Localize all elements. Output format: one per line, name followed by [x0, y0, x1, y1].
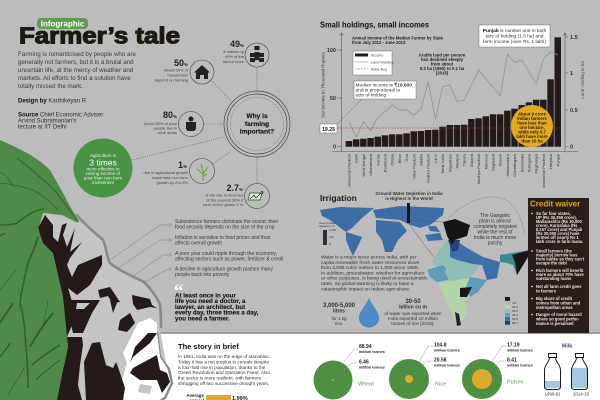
stat: 2.7% incomes of the poorest	[203, 183, 270, 208]
chart: wheat: million tonnes	[359, 366, 385, 370]
callout: arable land: (2015)	[436, 70, 449, 76]
section: the story in brief: In 1951, India was on the edge of starvation.	[178, 354, 270, 359]
illustration: farmer portrait	[0, 140, 172, 400]
state labels: Tamil Nadu	[440, 154, 445, 174]
connectors to central circle	[132, 68, 257, 184]
chart: pulses: 17.19	[507, 342, 520, 348]
legend	[353, 51, 393, 75]
state labels: Orissa	[390, 153, 395, 166]
panel: credit waiver: crore), Karnataka (Rs	[536, 223, 578, 228]
state labels: Manipur	[454, 153, 460, 168]
callout: 3 times	[74, 138, 132, 198]
left axis labels: 100	[327, 48, 336, 54]
stat: 1% agricultural growth: growth by 2%-3%	[157, 180, 188, 185]
value box: 19.25	[320, 124, 337, 133]
chart: pulses: million tonnes	[507, 364, 533, 368]
state labels: Goa	[404, 153, 409, 162]
callout: gold circle: Indian farmers	[517, 116, 547, 121]
panel: credit waiver: UP (Rs 36,359 crore),	[536, 215, 577, 220]
section heading: irrigation: Irrigation	[320, 193, 357, 203]
stat: 3,000-5,000 litres: for 1 kg	[331, 316, 347, 321]
state labels: Rajasthan	[447, 154, 452, 172]
state labels: Andhra Pradesh	[426, 154, 431, 183]
state labels: Uttar Pradesh	[411, 154, 416, 179]
bars	[346, 37, 561, 147]
line: land holding	[349, 52, 558, 137]
cheek shadows	[63, 300, 100, 333]
central circle: why is farming important	[224, 91, 290, 157]
credits	[18, 98, 103, 130]
stat: 2.7% incomes of the poorest: of the poorest 30% if	[206, 198, 244, 202]
impact text list: affecting sectors such as power, fertilizer & credit	[175, 256, 284, 262]
state labels: Tripura	[462, 153, 467, 167]
stat: 2.7% incomes of the poorest: is the rise in incomes	[206, 192, 243, 198]
map note: Gangetic plain	[473, 213, 517, 246]
irrigation text: capita renewable fresh water resources down	[321, 260, 420, 266]
callout: gold circle: than 10 ha	[521, 138, 543, 144]
impact text list: food security depends on the size of the crop	[175, 224, 275, 230]
chart: wheat	[314, 344, 385, 400]
y axis title: land: Land Holding in ha	[580, 61, 585, 99]
section: the story in brief: shrugging off two successive drought years.	[178, 381, 269, 386]
state labels: Jharkhand	[382, 154, 388, 173]
irrigation text: or other purposes, is being used at unsustainable	[321, 276, 428, 282]
callout: 3 times: Agriculture is	[90, 153, 117, 158]
section: the story in brief: The story in brief	[178, 342, 239, 351]
callout: median income: and is proportional to	[356, 88, 401, 94]
bar: average annual growth: Average	[186, 393, 204, 398]
impact text list: Inflation is sensitive to food prices and thus	[175, 235, 271, 241]
chart: wheat: Wheat	[358, 382, 374, 388]
callout: Punjab: Punjab is number one in both	[483, 28, 547, 34]
stat: 2.7% incomes of the poorest: farm sector grows 1 %	[203, 202, 243, 207]
legend: India Avg	[371, 68, 387, 72]
callout: Punjab: farm income (over Rs. 1 lakh)	[483, 39, 546, 45]
depletion legend: 1,500	[329, 228, 336, 232]
stat: 49% labour force	[223, 39, 269, 67]
callout: median income: size of holding	[356, 92, 386, 98]
right axis labels: 1.5	[570, 35, 578, 41]
stat: 80% rural poor: people live in	[154, 126, 177, 130]
right axis labels: 1	[570, 71, 573, 77]
icon: water drop	[359, 298, 379, 328]
stat: 50% households	[155, 58, 214, 84]
chart subtitle	[352, 36, 444, 45]
beard shadow	[157, 332, 172, 400]
India legend	[505, 297, 518, 325]
badge: Infographic: Infographic	[41, 20, 85, 28]
state labels: West Bengal	[361, 154, 366, 177]
credits: Source Chief Economic Adviser	[18, 112, 103, 118]
irrigation text: In addition, groundwater, whether for agriculture	[321, 270, 425, 276]
India legend: 69.5	[512, 317, 518, 321]
chart: milk bottles: 1990-91	[545, 392, 561, 396]
eye	[118, 313, 135, 332]
credits: Arvind Subramanian's	[18, 118, 77, 124]
callout: arable land: has declined steeply	[421, 57, 464, 62]
stat: 30-50 billion cu m: tonnes of rice (2015).	[391, 321, 435, 326]
quote: At least once in your	[175, 292, 236, 300]
map note: Gangetic plain: The Gangetic	[480, 213, 511, 219]
panel: credit waiver: comes from urban and	[536, 300, 581, 306]
chart: rice: 104.8	[434, 342, 447, 348]
quote: life you need a doctor, a	[175, 298, 246, 305]
section: the story in brief	[178, 342, 271, 400]
callout: gold circle: lakh have more	[516, 134, 548, 139]
callout: gold circle: one hectare,	[519, 125, 545, 130]
legend: Income	[371, 54, 383, 58]
section: the story in brief: a four-fold rise in population, thanks to the	[178, 365, 266, 370]
impact text list: people back into poverty	[175, 272, 230, 278]
intro text	[18, 51, 137, 90]
chart: pulses	[462, 342, 533, 399]
panel: credit waiver: more as about 70% have	[536, 272, 585, 277]
stat: 2.7% incomes of the poorest: 2.7%	[226, 183, 243, 193]
state labels: Meghalaya	[534, 153, 539, 174]
state labels: Madhya Pradesh	[476, 154, 481, 184]
intro text: totally missed the mark.	[18, 83, 83, 90]
map heading	[376, 191, 443, 201]
stat: 1% agricultural growth	[144, 158, 214, 185]
India legend: 35.6	[512, 309, 518, 313]
state labels: Chhattisgarh	[512, 154, 517, 177]
stat: 50% households: 50%	[174, 58, 188, 68]
left axis labels: 0	[333, 144, 336, 150]
quote	[174, 281, 259, 322]
callout: median income: Median income is ₹19,600	[356, 82, 412, 88]
map heading: is Highest in the World	[385, 196, 433, 201]
map note: Gangetic plain: plain is almost	[479, 218, 511, 224]
panel: credit waiver: from banks so they can't	[536, 256, 585, 262]
section: the story in brief: Today it has a net surplus in cereals despite	[178, 359, 269, 364]
state labels: Mizoram	[483, 153, 488, 169]
state labels: Assam	[498, 153, 503, 166]
India legend: 46.2	[512, 313, 518, 317]
stat: 30-50 billion cu m: billion cu m	[399, 304, 427, 310]
India legend: 4.6	[512, 301, 517, 305]
India map	[409, 197, 530, 326]
map heading: Ground Water Depletion in India	[376, 191, 443, 196]
callout: 3 times: raising income of	[86, 171, 121, 176]
panel: credit waiver: Small farmers (the	[536, 248, 572, 254]
callout: arable land: 0.3 ha (1960) to 0.1 ha	[420, 66, 465, 71]
chart: pulses: 8.41	[507, 358, 517, 364]
panel: credit waiver	[528, 198, 589, 333]
intro text: markets. All efforts to find a solution have	[18, 75, 131, 82]
stat: 49% labour force: 49%	[230, 39, 244, 49]
panel: credit waiver: majority) borrow less	[536, 252, 578, 258]
state labels: Karnataka	[519, 153, 524, 172]
stat: 1% agricultural growth: rise in agricultural growth	[144, 170, 188, 175]
section: the story in brief: the sector is more resilient, with farmers	[178, 376, 261, 381]
state labels: Sikkim	[418, 153, 424, 166]
panel: credit waiver: Credit waiver	[530, 200, 580, 208]
panel: credit waiver: where so good perfor-	[535, 316, 580, 322]
callout: arable land: from about	[431, 62, 454, 66]
depletion legend	[319, 221, 336, 246]
panel: credit waiver: outstanding loans	[536, 276, 572, 281]
state labels: Delhi	[354, 154, 359, 163]
callout: Punjab	[479, 25, 550, 47]
chart: pulses: million tonnes	[507, 348, 533, 352]
impact text list: A decline in agriculture growth pushes many	[175, 266, 273, 272]
callout: 3 times: poor than non-farm	[84, 176, 122, 180]
hair strands	[38, 215, 102, 347]
stat: 30-50 billion cu m: 30-50	[405, 299, 421, 305]
India legend: 28.4	[512, 305, 518, 309]
state labels: Nagaland	[490, 154, 496, 171]
panel: credit waiver: Big share of credit	[536, 296, 573, 301]
stat: 50% households: depend on farming	[155, 78, 188, 82]
axes	[332, 33, 578, 152]
stat: 3,000-5,000 litres: rice.	[335, 321, 343, 326]
central circle: why is farming important: important?	[240, 128, 274, 136]
panel: credit waiver: escape the debt	[536, 260, 568, 266]
callout: gold circle	[511, 105, 553, 147]
state labels: Telangana	[526, 153, 532, 172]
impact text list: Subsistence farmers dominate the scene; their	[175, 219, 278, 225]
state labels: Bihar	[397, 153, 402, 163]
left axis labels: 50	[330, 96, 336, 102]
intro text: generally not farmers, but it is a brutal and	[18, 59, 134, 66]
quote: every day, three times a day,	[175, 310, 259, 317]
state labels: Gujarat	[469, 153, 474, 167]
callout: gold circle: have less than	[517, 120, 547, 126]
callout: Punjab: size of holding (1.5 ha) and	[486, 34, 544, 40]
India legend: 98.7	[512, 321, 518, 325]
callout: 3 times: more effective in	[87, 166, 120, 172]
chart: milk bottles	[544, 344, 589, 396]
stat: 50% households: households	[168, 72, 188, 78]
section heading: small holdings: Small holdings, small incomes	[320, 20, 429, 30]
stat: 49% labour force: 49% of the	[225, 54, 245, 59]
turban	[0, 140, 79, 400]
depletion legend: 100	[329, 235, 334, 239]
stat: 49% labour force: labour force	[223, 59, 245, 64]
credits: Design by Karthikeyan R	[18, 98, 87, 104]
impact text list: A poor year could ripple through the economy,	[175, 251, 277, 257]
state labels: Punjab	[555, 153, 560, 166]
map note: Gangetic plain: completely irrigated	[473, 224, 517, 230]
chart: milk bottles: 2014-15	[573, 392, 589, 396]
stat: 3,000-5,000 litres: 3,000-5,000	[323, 303, 356, 309]
panel: credit waiver: (Rs 20,000 crore) have	[536, 231, 580, 236]
callout: arable land: Arable land per person	[419, 52, 466, 58]
chart subtitle: from July 2012 - June 2013	[352, 40, 406, 45]
stat: 80% rural poor: 80%	[163, 110, 177, 120]
chart: rice: Rice	[435, 382, 446, 388]
panel: credit waiver: Rich farmers will benefit	[536, 268, 584, 273]
stat: 1% agricultural growth: could raise non farm	[152, 175, 189, 180]
irrigation text: rates. So global warming is likely to have a	[321, 281, 414, 287]
panel: credit waiver: 8,167 crore) and Punjab	[536, 227, 583, 232]
panel: credit waiver: Danger of moral hazard	[536, 312, 582, 317]
chart: milk bottles: Milk	[562, 344, 573, 350]
chart: wheat: 6.46	[359, 360, 369, 366]
panel: credit waiver: metropolitan areas	[536, 305, 573, 310]
left axis labels	[327, 48, 336, 150]
right axis labels	[570, 35, 578, 150]
chart: rice: 20.58	[434, 358, 447, 364]
callout: 3 times: 3 times	[89, 158, 117, 168]
state labels: Maharashtra	[505, 153, 510, 176]
stat: 80% rural poor	[144, 110, 204, 136]
irrigation text: from 3,000 cubic metres to 1,000 since 1960.	[321, 265, 419, 271]
state labels: Uttarakhand	[368, 154, 373, 176]
line: India average	[337, 127, 561, 129]
bar: average annual growth	[186, 393, 248, 400]
depletion legend: depletion m³	[319, 224, 334, 228]
state labels: J & K	[433, 154, 438, 164]
callout: median income	[337, 81, 416, 124]
icon: bottle 2014-15	[572, 354, 588, 390]
chart: wheat: million tonnes	[359, 350, 385, 354]
stat: 80% rural poor: About 80% of poor	[144, 121, 178, 126]
beard white	[120, 318, 170, 400]
icon: bottle 1990-91	[544, 354, 560, 390]
depletion legend: Ground water	[319, 221, 336, 225]
quote: you need a farmer.	[175, 316, 230, 322]
world map	[319, 203, 444, 256]
chart: rice: million tonnes	[434, 348, 460, 352]
panel: credit waiver: mance is penalised	[536, 321, 574, 326]
legend: Land Holding	[371, 60, 393, 64]
chart: pulses: Pulses	[507, 380, 524, 386]
section: the story in brief: Green Revolution and Operation Flood. Also,	[178, 370, 271, 375]
central circle: why is farming important: Why is	[246, 113, 268, 120]
irrigation text	[321, 254, 428, 292]
y axis title: income: Net income in Thousand Rupees	[320, 52, 326, 118]
panel: credit waiver: So far four states,	[536, 211, 571, 216]
title: Farmer’s tale	[19, 22, 180, 48]
stat: 50% households: About 50% of	[164, 68, 189, 72]
lower hair	[57, 337, 83, 400]
badge: Infographic	[37, 18, 88, 29]
quote: lawyer, an architect, but	[175, 304, 245, 311]
state labels: Haryana	[548, 153, 553, 169]
irrigation text: Water is a major issue across India, with per	[321, 254, 417, 260]
state labels: Kerala	[375, 153, 380, 166]
credits: lecture at IIT Delhi	[18, 124, 67, 130]
panel: credit waiver: Maharashtra (Rs 30,000	[536, 219, 582, 224]
callout: arable land	[419, 52, 466, 76]
stat: 30-50 billion cu m: of water was exported when	[384, 311, 442, 316]
central circle: why is farming important: farming	[245, 121, 269, 128]
moustache	[130, 333, 157, 363]
state labels	[346, 153, 560, 188]
intro text: Farming is romanticised by people who are	[18, 51, 137, 58]
panel: credit waiver: Not all farm credit goes	[536, 284, 582, 289]
stat: 1% agricultural growth: 1%	[178, 160, 187, 170]
stat: 80% rural poor: rural areas	[158, 130, 177, 135]
panel: credit waiver: written off nearly Rs 1	[535, 235, 579, 240]
stat: 3,000-5,000 litres	[323, 303, 356, 326]
state labels: Arunachal Pradesh	[541, 154, 546, 188]
right axis labels: 0.5	[570, 108, 578, 114]
intro text: uncertain life, at the mercy of weather and	[18, 67, 134, 74]
quote: “	[174, 281, 184, 302]
impact text list: affects overall growth	[175, 240, 222, 246]
right axis labels: 0	[570, 144, 573, 150]
chart: wheat: 88.94	[359, 344, 372, 350]
panel: credit waiver: to farmers	[536, 288, 557, 294]
bar chart: income by state	[320, 25, 585, 188]
depletion legend: 0	[329, 242, 331, 246]
value box: 19.25: 19.25	[322, 127, 335, 133]
panel: credit waiver: lakh crore in farm loans.	[536, 239, 583, 244]
chart: rice	[389, 342, 460, 399]
stat: 30-50 billion cu m: India exported 10 million	[388, 316, 438, 321]
chart subtitle: Annual Income of the Median Farmer by State	[352, 36, 444, 40]
chart: rice: million tonnes	[434, 364, 460, 368]
stat: 30-50 billion cu m	[384, 299, 442, 326]
stat: 3,000-5,000 litres: litres	[333, 308, 345, 314]
callout: 3 times: investment	[92, 180, 115, 185]
map note: Gangetic plain: India is much more	[474, 235, 516, 241]
impact text list	[175, 219, 284, 278]
stat: 49% labour force: It makes up	[223, 49, 245, 54]
face base	[38, 213, 170, 400]
callout: gold circle: while only 0.7	[517, 130, 547, 134]
map note: Gangetic plain: while the rest of	[477, 230, 513, 236]
callout: gold circle: About 9 crore	[518, 112, 547, 116]
impact arrows	[110, 224, 172, 283]
map note: Gangetic plain: patchy	[488, 240, 503, 246]
state labels: Himachal Pradesh	[346, 154, 352, 187]
irrigation text: catastrophic impact on Indian agriculture.	[321, 286, 410, 292]
